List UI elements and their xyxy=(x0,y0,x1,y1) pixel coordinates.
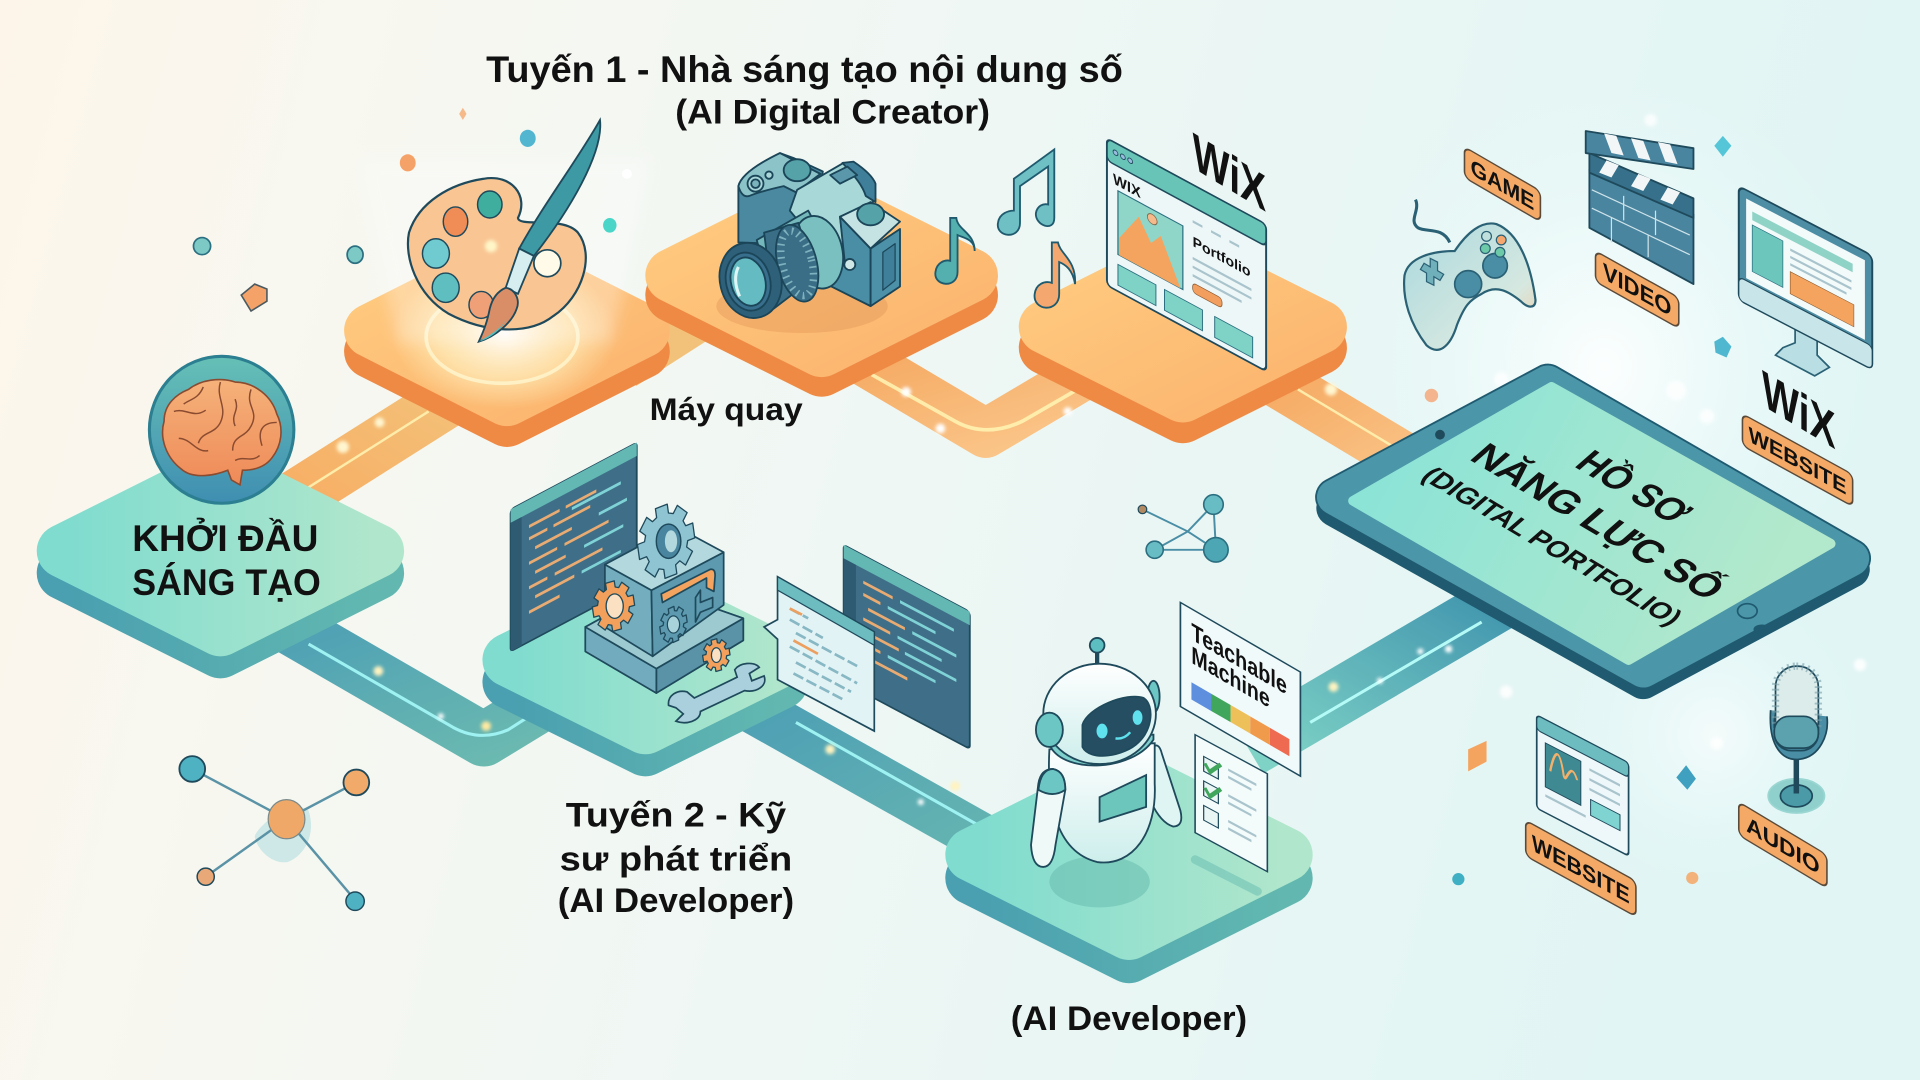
logo: Wix: WiX xyxy=(1193,121,1266,223)
tag: WEBSITE bottom: WEBSITE xyxy=(1532,831,1630,910)
platform: camera xyxy=(672,201,971,370)
connector: palette to camera xyxy=(624,289,747,367)
connector: robot to tablet xyxy=(1249,595,1512,749)
icon: robot xyxy=(1031,638,1181,867)
card: teachable machine: Teachable xyxy=(1191,617,1287,700)
platform: portfolio xyxy=(1046,258,1320,416)
icon: camera xyxy=(712,153,900,325)
connector: portfolio to tablet xyxy=(1249,365,1445,482)
icon: paintbrush xyxy=(479,120,600,342)
tag: AUDIO xyxy=(1739,802,1827,888)
tag: AUDIO: AUDIO xyxy=(1746,812,1820,881)
platform: robot xyxy=(972,776,1286,956)
tag: GAME: GAME xyxy=(1471,154,1534,216)
label: AI Developer: (AI Developer) xyxy=(1011,1000,1247,1038)
icon: brain in circle xyxy=(149,356,294,503)
connector: start to palette xyxy=(272,389,465,512)
connector: camera to portfolio xyxy=(833,343,1139,433)
tag: WEBSITE top: WEBSITE xyxy=(1749,422,1847,500)
icon: portfolio browser window xyxy=(1107,138,1266,371)
label: route 2: (AI Developer) xyxy=(558,882,794,920)
icon: code document xyxy=(764,577,874,731)
connector: start to code platform xyxy=(263,612,612,740)
card: teachable machine xyxy=(1180,602,1300,776)
card: checklist xyxy=(1195,735,1267,872)
icon: microphone xyxy=(1768,666,1827,813)
icon: game controller xyxy=(1404,200,1536,350)
icon: code panel left xyxy=(511,443,637,651)
title: route 1: (AI Digital Creator) xyxy=(675,94,990,132)
light glow around tablet xyxy=(1322,61,1886,894)
title: route 1: Tuyến 1 - Nhà sáng tạo nội dung số xyxy=(486,49,1123,90)
label: route 2: sư phát triển xyxy=(560,841,792,879)
icon: machine cube with gears xyxy=(585,527,743,693)
floating shapes right xyxy=(1425,136,1731,885)
label: start: KHỞI ĐẦU xyxy=(132,517,318,559)
label: route 2 xyxy=(558,797,794,920)
platform: start xyxy=(64,473,377,651)
label: start xyxy=(132,517,321,603)
logo: Wix website: WiX xyxy=(1762,358,1836,460)
connector: code platform to robot xyxy=(722,692,1078,891)
icon: palette xyxy=(408,178,586,329)
icon: portfolio browser window: WIX xyxy=(1113,171,1141,202)
tablet text: HỒ SƠ xyxy=(1566,443,1701,532)
tablet text: NĂNG LỰC SỐ xyxy=(1461,436,1735,607)
title: route 1 xyxy=(486,49,1123,132)
icon: desktop monitor xyxy=(1739,186,1872,376)
label: start: SÁNG TẠO xyxy=(132,562,321,603)
icon: wrench xyxy=(668,663,765,723)
icon: clapperboard xyxy=(1586,131,1693,284)
label: camera: Máy quay xyxy=(650,391,803,427)
icon: gears xyxy=(589,496,732,674)
icon: node network upper xyxy=(1138,495,1228,562)
icon: music notes xyxy=(935,149,1075,308)
card: teachable machine: Machine xyxy=(1191,641,1270,714)
panel: tablet digital portfolio xyxy=(1335,383,1851,681)
floating shapes around palette xyxy=(193,108,632,311)
label: route 2: Tuyến 2 - Kỹ xyxy=(566,797,786,835)
icon: portfolio browser window: Portfolio xyxy=(1193,234,1251,281)
icon: mini website xyxy=(1537,715,1629,856)
tablet text: (DIGITAL PORTFOLIO) xyxy=(1415,463,1688,631)
light beam above palette xyxy=(358,159,649,343)
tag: VIDEO: VIDEO xyxy=(1603,258,1671,322)
platform: code xyxy=(509,593,781,749)
platform: palette xyxy=(371,257,643,420)
icon: node network lower xyxy=(179,756,369,910)
icon: code panel right xyxy=(844,545,970,749)
